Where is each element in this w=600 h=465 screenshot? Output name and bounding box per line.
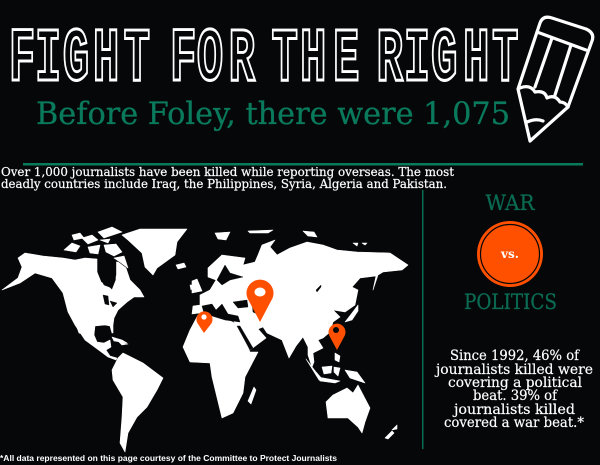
war vs politics text: covering a political	[448, 375, 583, 391]
footnote: *All data represented on this page courtesy of the Committee to Protect Journalists	[0, 454, 338, 463]
south america	[112, 353, 163, 452]
vs badge	[477, 221, 543, 287]
war label: WAR	[486, 191, 536, 215]
world map	[2, 227, 408, 452]
war vs politics text: Since 1992, 46% of	[450, 348, 581, 364]
baltic	[217, 265, 243, 285]
australia	[326, 385, 370, 433]
seas	[98, 256, 321, 350]
baja	[75, 322, 82, 334]
divider: vertical	[422, 190, 424, 449]
black sea	[233, 300, 248, 308]
arctic russia	[215, 230, 367, 246]
africa	[183, 312, 258, 418]
hudson bay	[98, 256, 116, 288]
war vs politics text: beat. 39% of	[473, 388, 559, 404]
arctic islands	[64, 227, 128, 268]
mediterranean	[202, 304, 240, 322]
caspian	[252, 303, 257, 314]
north america	[2, 253, 144, 360]
greenland	[122, 229, 187, 275]
pin: philippines	[328, 324, 346, 350]
intro text	[1, 165, 454, 191]
madagascar	[248, 387, 256, 404]
pin: iraq	[246, 280, 273, 322]
eurasia	[192, 240, 408, 367]
new zealand	[385, 425, 397, 439]
red sea	[237, 326, 253, 350]
pin: algeria	[196, 311, 213, 333]
war vs politics text: journalists killed	[452, 402, 575, 418]
great lakes	[103, 295, 117, 307]
divider: horizontal	[23, 163, 583, 166]
lake baikal	[316, 285, 321, 292]
vs badge: vs.	[500, 247, 519, 261]
subtitle: Before Foley, there were 1,075	[36, 96, 510, 132]
intro text: Over 1,000 journalists have been killed while reporting overseas. The most	[1, 165, 454, 179]
war vs politics text: covered a war beat.*	[444, 415, 584, 431]
war vs politics text	[434, 348, 593, 431]
caribbean	[112, 337, 128, 345]
war vs politics text: journalists killed were	[434, 362, 593, 378]
icon: pencil	[518, 17, 593, 141]
iceland and uk	[176, 263, 202, 293]
title: FIGHT FOR THE RIGHT	[9, 16, 518, 103]
intro text: deadly countries include Iraq, the Philippines, Syria, Algeria and Pakistan.	[1, 177, 447, 191]
politics label: POLITICS	[464, 290, 557, 314]
asian islands	[306, 305, 365, 383]
